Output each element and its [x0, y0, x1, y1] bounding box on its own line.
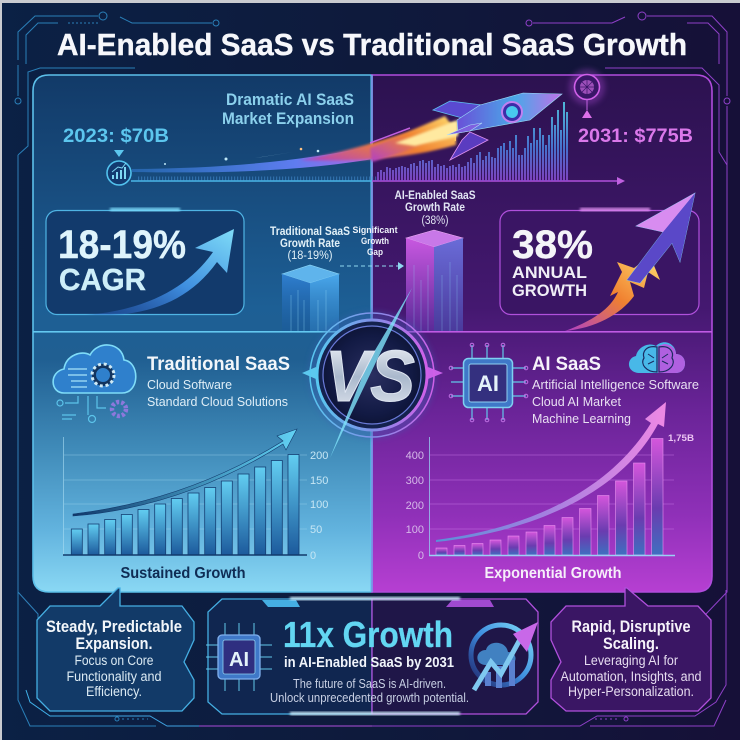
timeline axis arrow — [131, 177, 625, 185]
market expansion heading — [222, 90, 354, 128]
axis labels: 200 — [310, 450, 328, 462]
caption: Sustained Growth: Sustained Growth — [120, 565, 246, 582]
circuit frame: left — [15, 12, 372, 726]
icon: cloud with gears — [53, 345, 136, 422]
callout: 18-19% CAGR — [46, 208, 244, 315]
axis labels: 100 — [406, 524, 424, 536]
bar chart: AI SaaS — [406, 402, 694, 562]
callout: rapid scaling: Hyper-Personalization. — [568, 684, 694, 699]
callout: 18-19% CAGR: CAGR — [59, 262, 146, 297]
rocket — [370, 93, 562, 162]
axis labels: 300 — [406, 475, 424, 487]
subtext: Cloud AI Market — [532, 394, 621, 409]
heading: AI SaaS — [532, 354, 699, 426]
traditional growth rate label: Growth Rate — [280, 238, 340, 250]
callout: rapid scaling — [551, 588, 711, 711]
icon: rocket arrow — [565, 193, 695, 331]
callout: steady expansion: Expansion. — [76, 635, 152, 653]
AI growth rate label — [394, 190, 476, 227]
peak value label: 1,75B — [668, 433, 694, 444]
callout: 38% annual growth: ANNUAL — [512, 263, 587, 282]
subtext — [532, 377, 699, 426]
rocket trail — [132, 122, 456, 172]
callout: 11x growth: The future of SaaS is AI-driven. — [293, 677, 446, 691]
subtext: Cloud Software — [147, 377, 232, 392]
trend arrow — [73, 429, 297, 516]
VS badge — [302, 288, 443, 458]
icon: AI chip — [449, 343, 528, 422]
main title: AI-Enabled SaaS vs Traditional SaaS Growth — [57, 27, 687, 62]
callout: 11x growth: Unlock unprecedented growth potential. — [270, 691, 469, 705]
axis labels: 100 — [310, 499, 328, 511]
callout: steady expansion: Efficiency. — [86, 684, 142, 699]
axis labels — [406, 450, 424, 562]
market expansion heading: Dramatic AI SaaS — [226, 90, 354, 109]
arrow: rising blue — [85, 229, 234, 315]
traditional growth rate label — [270, 226, 350, 262]
bar chart: traditional SaaS — [63, 429, 328, 562]
panel: AI SaaS half — [372, 75, 712, 592]
axis labels: 0 — [418, 550, 424, 562]
trend arrow — [436, 402, 666, 542]
traditional growth rate label: Traditional SaaS — [270, 226, 350, 238]
significant growth gap label: Gap — [367, 247, 383, 258]
callout: steady expansion — [37, 588, 194, 711]
callout: steady expansion: Functionality and — [66, 669, 162, 684]
axis labels: 200 — [406, 500, 424, 512]
AI cube bar — [406, 230, 463, 331]
callout: rapid scaling: Leveraging AI for — [584, 653, 678, 668]
significant growth gap label: Significant — [352, 225, 398, 236]
callout: 38% annual growth — [500, 193, 699, 331]
callout: steady expansion: Steady, Predictable — [46, 618, 182, 636]
axis labels — [310, 450, 328, 562]
subtext: Artificial Intelligence Software — [532, 377, 699, 392]
timeline start marker icon — [107, 150, 131, 185]
AI growth rate label: Growth Rate — [405, 202, 465, 214]
label: 2023 value: 2023: $70B — [63, 125, 169, 147]
icon: AI chip small — [206, 623, 272, 691]
axis labels: 150 — [310, 475, 328, 487]
subtext: Standard Cloud Solutions — [147, 394, 288, 409]
panel: traditional SaaS half — [33, 75, 372, 592]
circuit frame: right — [372, 12, 730, 726]
traditional cube bar — [282, 265, 339, 331]
label: 2031 value: 2031: $775B — [578, 125, 693, 147]
subtext: Machine Learning — [532, 411, 631, 426]
centre divider — [33, 75, 712, 592]
icon: AI chip small: AI — [229, 649, 249, 671]
timeline end marker icon — [569, 69, 605, 118]
icon: AI chip: AI — [477, 371, 499, 396]
callout: rapid scaling: Scaling. — [603, 635, 659, 653]
callout: 11x growth — [206, 597, 538, 715]
icon: brain cloud — [629, 342, 685, 373]
axis labels: 400 — [406, 450, 424, 462]
market growth mini bars — [138, 102, 567, 181]
callout: steady expansion: Focus on Core — [74, 653, 154, 668]
AI growth rate label: AI-Enabled SaaS — [394, 190, 476, 202]
icon: cloud growth arrow — [471, 622, 538, 690]
caption: Exponential Growth: Exponential Growth — [484, 565, 622, 582]
callout: 38% annual growth: GROWTH — [512, 281, 587, 300]
significant growth gap label: Growth — [361, 236, 389, 247]
callout: 11x growth: 11x Growth — [283, 614, 453, 655]
callout: 11x growth: in AI-Enabled SaaS by 2031 — [284, 655, 454, 671]
axis labels: 0 — [310, 550, 316, 562]
heading: AI SaaS: AI SaaS — [532, 354, 601, 375]
axis labels: 50 — [310, 524, 322, 536]
subtext — [147, 377, 288, 409]
market expansion heading: Market Expansion — [222, 109, 354, 128]
heading: Traditional SaaS: Traditional SaaS — [147, 354, 290, 375]
callout: rapid scaling: Rapid, Disruptive — [572, 618, 690, 636]
heading: Traditional SaaS — [147, 354, 290, 409]
AI growth rate label: (38%) — [422, 215, 449, 227]
callout: rapid scaling: Automation, Insights, and — [560, 669, 702, 684]
VS badge: VS — [325, 337, 415, 417]
traditional growth rate label: (18-19%) — [288, 250, 333, 262]
callout: 18-19% CAGR: 18-19% — [58, 223, 186, 267]
callout: 38% annual growth: 38% — [512, 223, 593, 267]
significant growth gap label — [352, 225, 398, 258]
dashed gap arrow — [340, 262, 404, 270]
